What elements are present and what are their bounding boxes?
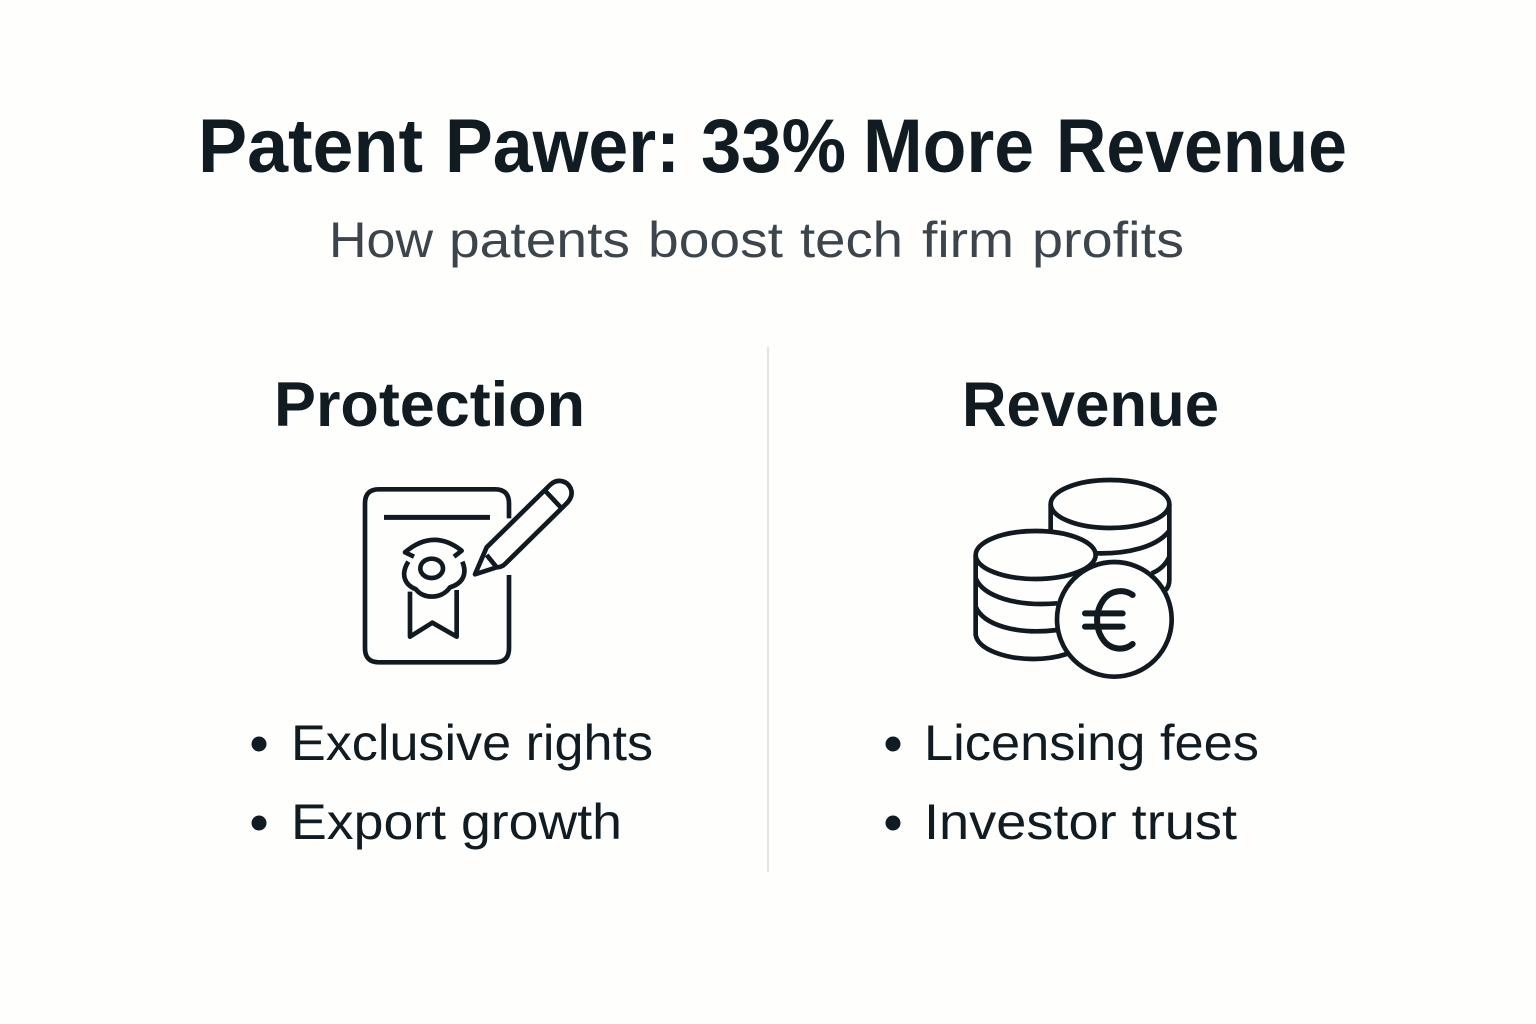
panel: revenue — [886, 370, 1259, 850]
title: Patent — [198, 104, 423, 189]
bullet list: revenue: Investor trust — [924, 794, 1237, 850]
subtitle: profits — [1032, 212, 1184, 268]
title: 33% — [701, 104, 846, 189]
title: More — [863, 104, 1034, 189]
subtitle: patents — [449, 212, 630, 268]
subtitle — [329, 212, 1184, 268]
heading: protection: Protection — [274, 370, 585, 440]
bullet list: protection: Export growth — [291, 794, 622, 850]
subtitle: firm — [922, 212, 1014, 268]
bullet list: protection — [252, 715, 653, 850]
icon: coin stacks with euro — [976, 480, 1172, 677]
title — [198, 104, 1347, 189]
panel: protection — [252, 370, 653, 850]
title: Pawer: — [445, 104, 680, 189]
subtitle: boost — [648, 212, 783, 268]
icon: patent certificate with pencil — [365, 481, 572, 662]
subtitle: How — [329, 212, 434, 268]
subtitle: tech — [800, 212, 903, 268]
heading: revenue: Revenue — [962, 370, 1219, 440]
bullet list: revenue: Licensing fees — [924, 715, 1259, 771]
title: Revenue — [1056, 104, 1347, 189]
bullet list: protection: Exclusive rights — [291, 715, 653, 771]
bullet list: revenue — [886, 715, 1259, 850]
